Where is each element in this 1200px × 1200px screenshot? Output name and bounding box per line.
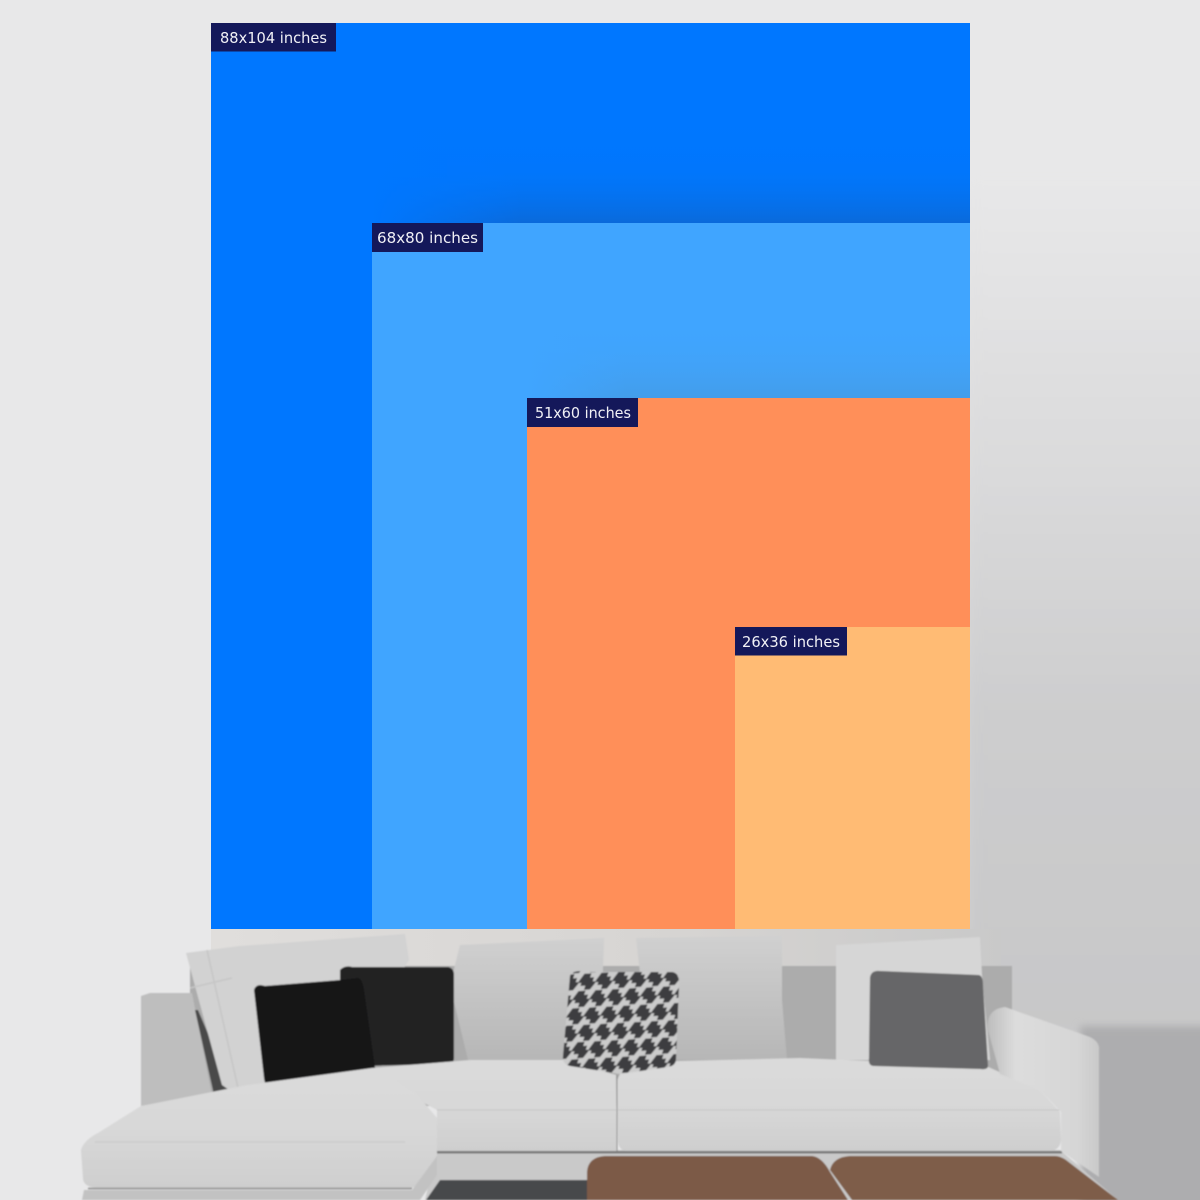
label: 26x36 inches [735,627,847,656]
right seat cushion [617,1058,1061,1151]
label: 88x104 inches: 88x104 inches [220,29,327,47]
houndstooth pillow [563,971,679,1074]
top band shadow [372,110,970,223]
ottoman right [830,1156,1118,1200]
label: 51x60 inches [527,398,638,427]
canvas: 68x80 inches [372,223,970,929]
sofa [81,934,1118,1200]
black pillow front [254,978,375,1087]
back cushion third [636,936,787,1060]
middle band shadow [527,320,970,398]
floor [426,1180,590,1200]
right arm [988,1007,1099,1177]
grey pillow [869,971,988,1069]
label: 51x60 inches: 51x60 inches [535,404,631,422]
back cushion fourth [836,937,990,1060]
shadow under canvas [211,929,1001,969]
floor and base backdrop [425,1150,1118,1200]
black pillow back [340,966,454,1066]
canvas: 26x36 inches [735,627,970,929]
chaise base [82,1156,437,1200]
lower right wall band [1080,1026,1200,1200]
canvas: 88x104 inches [211,23,970,929]
label: 68x80 inches [372,223,483,252]
right wall shadow [955,170,1200,1050]
ottoman left [587,1156,848,1200]
shadow between arm and cushion [195,1010,232,1095]
back cushion left [186,934,409,1092]
label: 68x80 inches: 68x80 inches [377,229,478,247]
left back arm [141,993,212,1106]
chaise seat cushion left [372,1060,617,1152]
back cushion second [450,938,604,1060]
chaise [81,1068,437,1188]
seat divider [616,1075,618,1152]
sofa back panel [190,966,1012,1106]
canvas: 51x60 inches [527,398,970,929]
label: 26x36 inches: 26x36 inches [742,633,840,651]
left cushion seam [190,950,238,1088]
seat front seam [437,1109,1060,1111]
label: 88x104 inches [211,23,336,52]
seat bottom shadow [437,1151,1062,1154]
chaise seam [95,1141,405,1143]
